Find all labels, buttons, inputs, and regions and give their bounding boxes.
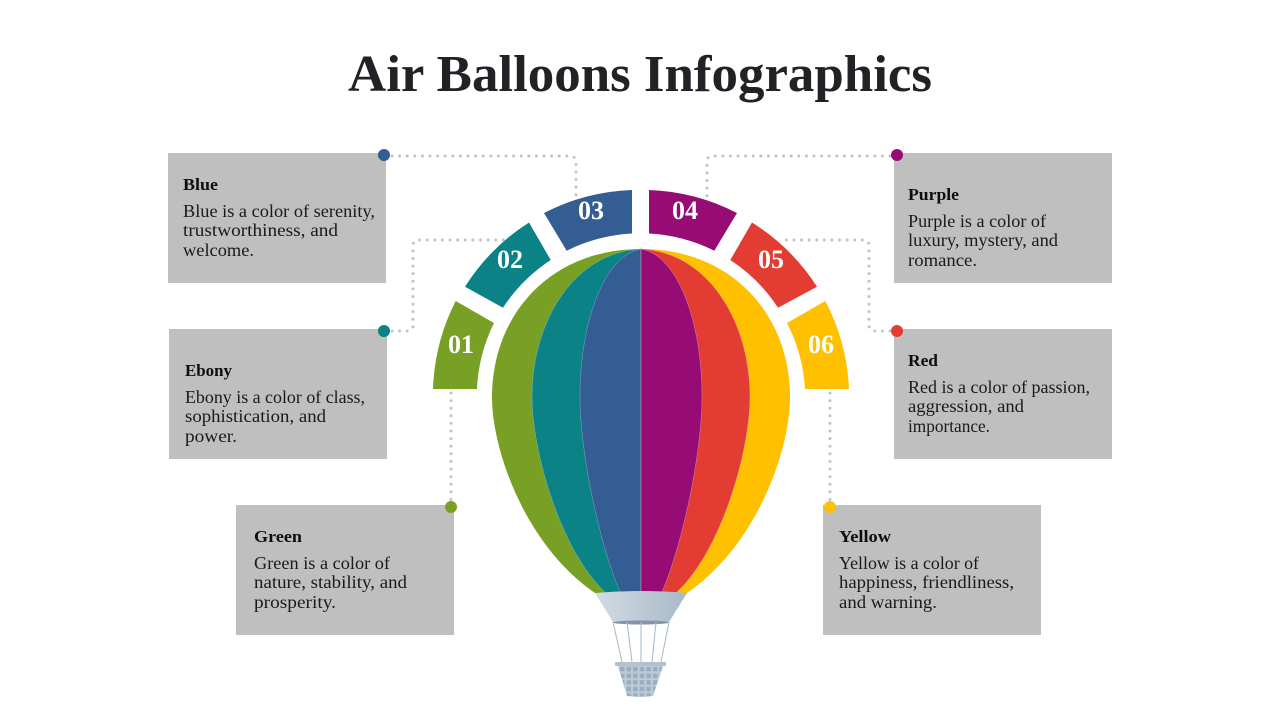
panel: purple: Purple is a color of bbox=[908, 211, 1046, 231]
panel: blue bbox=[168, 153, 386, 283]
panel: red: importance. bbox=[908, 416, 990, 436]
panel: purple bbox=[894, 153, 1112, 283]
panel: yellow: and warning. bbox=[839, 592, 937, 612]
dot: ebony bbox=[378, 325, 390, 337]
segment 06: 06 bbox=[808, 330, 834, 359]
panel: blue: trustworthiness, and bbox=[183, 220, 338, 240]
connector: red bbox=[780, 240, 890, 331]
segment 06 bbox=[787, 301, 849, 389]
balloon ropes bbox=[613, 622, 669, 662]
panel: yellow: happiness, friendliness, bbox=[839, 572, 1014, 592]
panel: yellow bbox=[823, 505, 1041, 635]
panel: green: Green bbox=[254, 527, 303, 546]
panel: green bbox=[236, 505, 454, 635]
panel: ebony: Ebony bbox=[185, 361, 232, 380]
panel: green: Green is a color of bbox=[254, 553, 390, 573]
panel: ebony bbox=[169, 329, 387, 459]
segment 04 bbox=[649, 190, 737, 251]
panel: purple: romance. bbox=[908, 250, 977, 270]
panel: yellow: Yellow is a color of bbox=[839, 553, 979, 573]
connector: purple bbox=[707, 156, 890, 196]
panel: red: Red bbox=[908, 351, 939, 370]
connector: ebony bbox=[392, 240, 505, 331]
segment 04: 04 bbox=[672, 196, 698, 225]
segment 02 bbox=[465, 222, 551, 308]
segment 05 bbox=[730, 222, 817, 308]
panel: ebony: Ebony is a color of class, bbox=[185, 387, 365, 407]
panel: purple: luxury, mystery, and bbox=[908, 230, 1058, 250]
segment 03: 03 bbox=[578, 196, 604, 225]
balloon basket bbox=[615, 662, 666, 697]
panel: red bbox=[894, 329, 1112, 459]
dot: green bbox=[445, 501, 457, 513]
panel: green: prosperity. bbox=[254, 592, 336, 612]
dot: yellow bbox=[824, 501, 836, 513]
panel: purple: Purple bbox=[908, 185, 959, 204]
balloon collar bbox=[595, 591, 687, 624]
connector: yellow bbox=[828, 393, 832, 500]
segment 05: 05 bbox=[758, 245, 784, 274]
title: Air Balloons Infographics bbox=[348, 46, 932, 103]
balloon envelope bbox=[492, 249, 790, 596]
dot: blue bbox=[378, 149, 390, 161]
panel: red: aggression, and bbox=[908, 396, 1024, 416]
connector: green bbox=[450, 393, 452, 500]
panel: yellow: Yellow bbox=[839, 527, 892, 546]
panel: blue: Blue is a color of serenity, bbox=[183, 201, 375, 221]
connector: blue bbox=[392, 156, 576, 196]
segment 01: 01 bbox=[448, 330, 474, 359]
dot: red bbox=[891, 325, 903, 337]
segment 02: 02 bbox=[497, 245, 523, 274]
panel: ebony: power. bbox=[185, 426, 237, 446]
panel: ebony: sophistication, and bbox=[185, 406, 326, 426]
panel: red: Red is a color of passion, bbox=[908, 377, 1090, 397]
segment 01 bbox=[433, 301, 494, 389]
panel: blue: welcome. bbox=[183, 240, 254, 260]
dot: purple bbox=[891, 149, 903, 161]
panel: blue: Blue bbox=[183, 175, 218, 194]
panel: green: nature, stability, and bbox=[254, 572, 407, 592]
segment 03 bbox=[544, 190, 632, 251]
